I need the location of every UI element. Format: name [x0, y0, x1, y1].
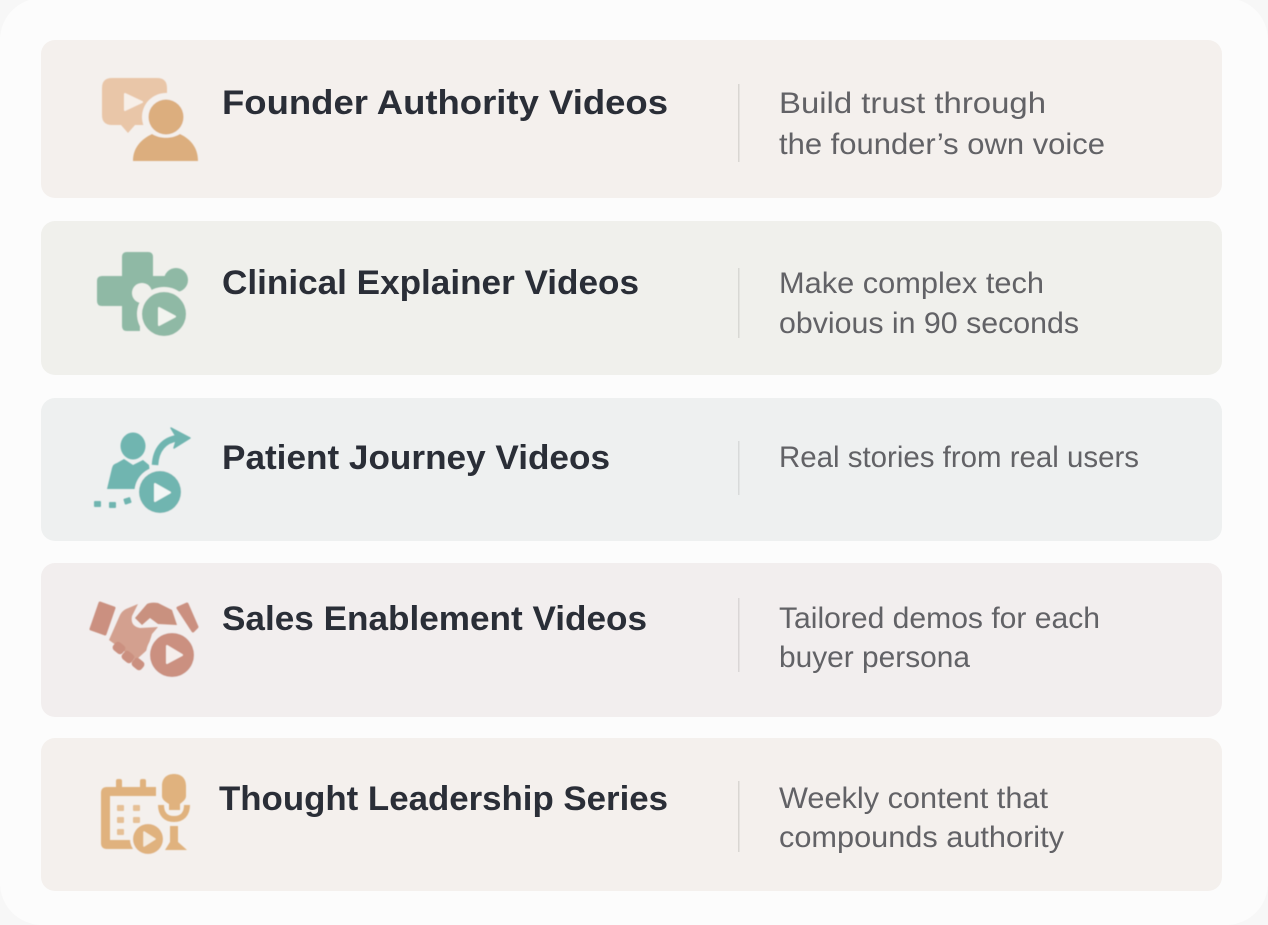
heading: founder authority videos: Founder Authority Videos [222, 84, 668, 122]
icon: speech bubble with founder [102, 78, 198, 161]
description: clinical explainer videos: obvious in 90 seconds [779, 307, 1079, 340]
heading: sales enablement videos: Sales Enablement Videos [222, 600, 647, 638]
icon: calendar and microphone [101, 774, 187, 857]
description: clinical explainer videos: Make complex tech [779, 267, 1044, 300]
icon: handshake with play [91, 603, 198, 681]
icon: patient path with play [94, 428, 190, 518]
description: patient journey videos: Real stories from real users [779, 441, 1139, 474]
description: sales enablement videos: buyer persona [779, 641, 970, 674]
icon: medical cross with play [97, 252, 191, 341]
panel: clinical explainer videos [41, 221, 1222, 375]
heading: patient journey videos: Patient Journey Videos [222, 439, 610, 477]
panel: sales enablement videos [41, 563, 1222, 717]
description: founder authority videos [779, 87, 1105, 161]
description: thought leadership series: Weekly content that [779, 782, 1049, 815]
panel: patient journey videos [41, 398, 1222, 541]
description: thought leadership series [779, 782, 1064, 854]
description: founder authority videos: Build trust through [779, 87, 1046, 120]
heading: thought leadership series: Thought Leadership Series [219, 780, 668, 818]
description: thought leadership series: compounds authority [779, 821, 1064, 854]
panel: founder authority videos [41, 40, 1222, 198]
description: founder authority videos: the founder’s own voice [779, 128, 1105, 161]
description: sales enablement videos [779, 602, 1100, 674]
panel: thought leadership series [41, 738, 1222, 891]
heading: clinical explainer videos: Clinical Explainer Videos [222, 264, 639, 302]
description: sales enablement videos: Tailored demos for each [779, 602, 1100, 635]
description: clinical explainer videos [779, 267, 1079, 340]
